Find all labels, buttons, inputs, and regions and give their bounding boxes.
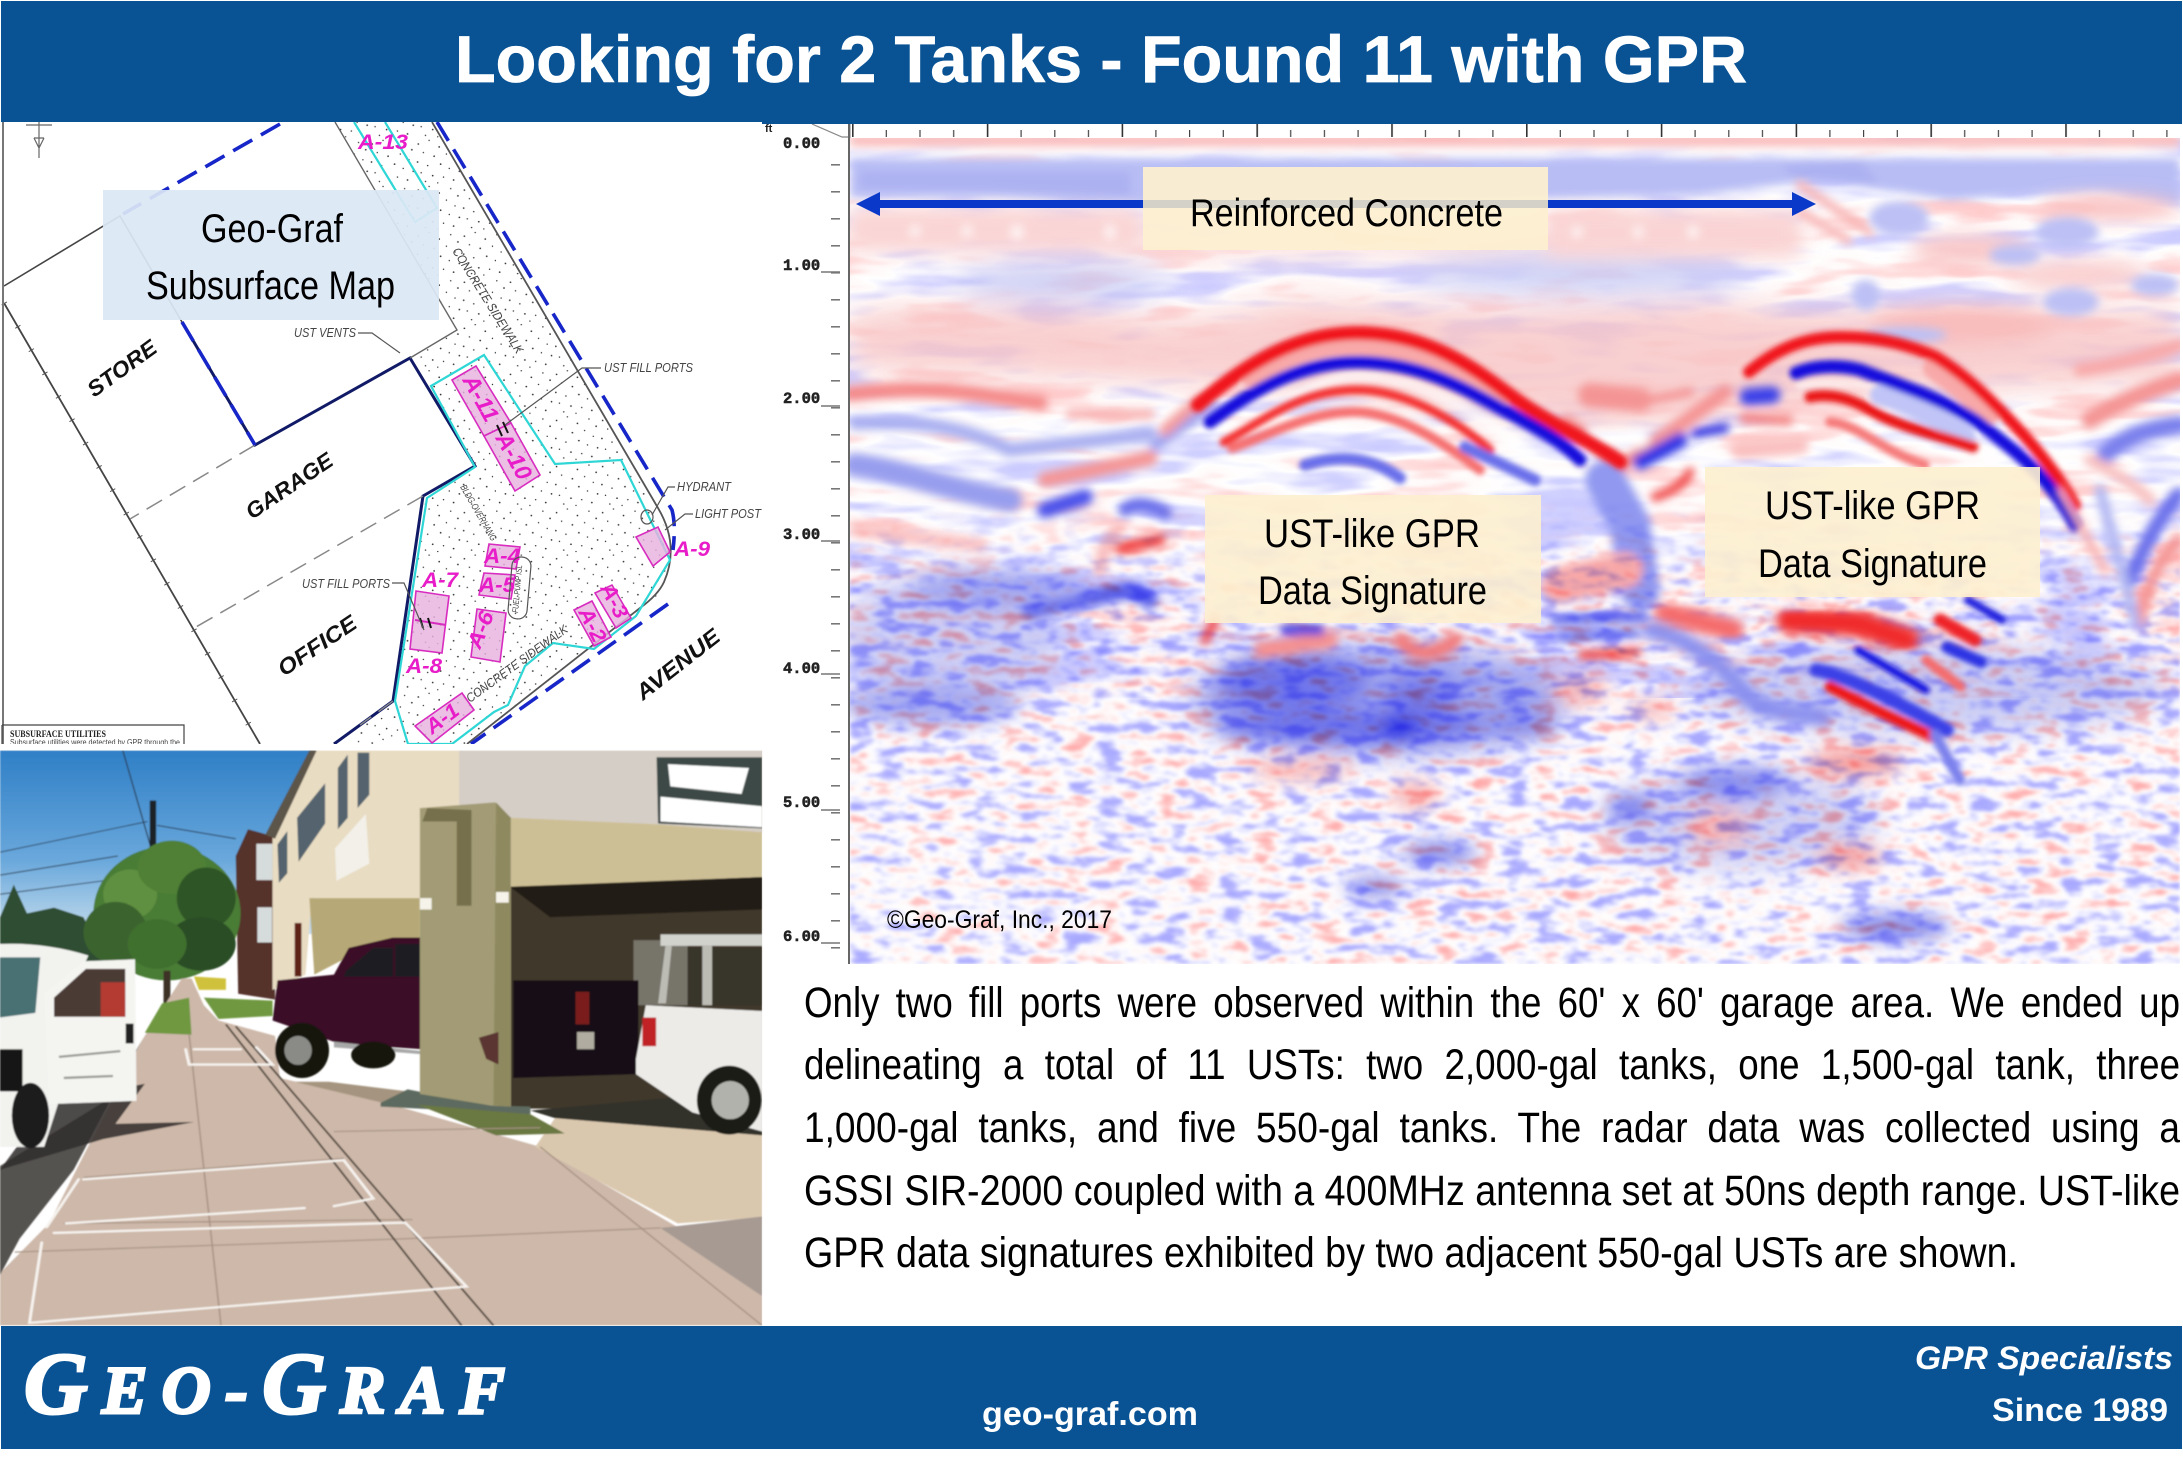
map annotations: UST FILL PORTS: [302, 577, 391, 591]
depth axis: ft: [765, 123, 773, 135]
noise layer lower: [850, 500, 2180, 964]
depth axis: 2.00: [783, 390, 820, 408]
tank labels: A-7: [421, 569, 459, 592]
tank labels: A-8: [405, 655, 442, 678]
cream building: [273, 750, 462, 990]
room labels: AVENUE: [630, 623, 726, 706]
wire shadows: [226, 1024, 494, 1326]
map annotations: [294, 245, 762, 705]
white pickup: [636, 1005, 762, 1132]
callout: UST signature 1: Data Signature: [1258, 569, 1487, 613]
text block: project description: [804, 979, 2180, 1277]
building outline: [3, 122, 671, 744]
chart: GPR radargram: [765, 123, 2182, 964]
diagonal stripes by arrow tip: [1800, 185, 1870, 240]
small pale spots: [909, 224, 1699, 240]
legend box: Subsurface utilities were detected by GPR through the: [10, 738, 180, 747]
brick building: [236, 829, 275, 999]
tank labels: [357, 131, 710, 740]
depth axis: 0.00: [783, 135, 820, 153]
panel: site photograph: [0, 750, 764, 1326]
hyperbola 1 halo: [1235, 376, 1530, 455]
callout: UST signature 1: [1205, 495, 1541, 623]
asphalt corner: [661, 1216, 762, 1296]
tank labels: A-3: [595, 579, 633, 623]
callout: UST signature 1: UST-like GPR: [1264, 512, 1480, 556]
header banner: [1, 1, 2182, 124]
map annotations: LIGHT POST: [695, 507, 762, 521]
callout: map title: Subsurface Map: [146, 264, 395, 308]
map annotations: BLDG OVERHANG: [457, 483, 498, 543]
broad layering: [840, 215, 2180, 870]
sidewalk joints: [15, 1034, 762, 1326]
upper windows: [277, 753, 369, 883]
concrete stippled area: [334, 122, 673, 744]
canopy underside: [511, 818, 762, 887]
callout: UST signature 2: Data Signature: [1758, 542, 1987, 586]
garage interior: [511, 877, 762, 1109]
upper wall: [459, 750, 764, 833]
distant trees: [0, 884, 103, 962]
blobs under callout 1: [1205, 620, 1455, 652]
depth axis: 4.00: [783, 660, 820, 678]
tank outlines: [410, 366, 670, 743]
cyan limit of survey: [354, 122, 670, 744]
footer banner: [1, 1326, 2182, 1449]
maroon pickup: [273, 937, 422, 1049]
room labels: OFFICE: [273, 609, 363, 681]
copyright note: ©Geo-Graf, Inc., 2017: [887, 906, 1112, 934]
dirt lot: [535, 1118, 762, 1223]
depth axis: 5.00: [783, 794, 820, 812]
leader lines: [358, 333, 693, 630]
map annotations: UST VENTS: [294, 326, 357, 340]
V trough and central reflectors: [1555, 392, 1800, 655]
right-side pale blue blobs: [1852, 201, 2179, 343]
icon: north arrow: [26, 122, 52, 158]
tank labels: A-11: [457, 369, 505, 426]
depth axis: 3.00: [783, 526, 820, 544]
tank labels: A-9: [673, 538, 710, 561]
map annotations: HYDRANT: [677, 480, 732, 494]
noise layer upper: [850, 138, 2180, 698]
tank labels: A-13: [357, 131, 408, 154]
hyperbola 1 reflectors: [1198, 333, 1620, 480]
sidewalk: [0, 978, 762, 1326]
map annotations: CONCRETE SIDEWALK: [449, 245, 526, 357]
map annotations: CONCRETE SIDEWALK: [464, 622, 571, 705]
map annotations: UST FILL PORTS: [604, 361, 694, 375]
column base: [381, 1089, 530, 1114]
right side reflectors: [2060, 345, 2180, 620]
lower slanted signatures: [1651, 600, 2002, 780]
legend box: [2, 725, 184, 747]
tank labels: A-6: [463, 608, 499, 653]
map annotations: FUEL PUMP ISL: [510, 564, 524, 613]
panel: subsurface map: [0, 122, 762, 747]
tank labels: A-1: [420, 699, 464, 740]
weeds: [417, 1105, 565, 1135]
room labels: [82, 334, 726, 706]
arrow: concrete extent: [856, 192, 1816, 216]
tank labels: A-2: [573, 603, 611, 647]
callout: UST signature 2: [1705, 467, 2040, 597]
depth axis: 1.00: [783, 257, 820, 275]
van: [0, 944, 88, 1147]
depth axis: [765, 123, 2182, 964]
logo: Geo-Graf: GEO-GRAF: [24, 1336, 505, 1433]
text block: project description: GPR data signatures exhibited by two adjacent 550-gal USTs are shown.: [804, 1229, 2018, 1277]
dark truck: [513, 980, 638, 1078]
fill port marks: [420, 422, 508, 628]
column: [420, 802, 511, 1107]
sky: [0, 750, 314, 934]
title: Looking for 2 Tanks - Found 11 with GPR: [455, 22, 1747, 96]
room labels: GARAGE: [241, 447, 339, 524]
entry recess: [309, 898, 420, 975]
tree: [83, 841, 241, 980]
tagline: GPR Specialists: [1915, 1340, 2173, 1376]
tank labels: A-4: [483, 545, 520, 568]
property boundary dashed: [123, 122, 674, 744]
radar data image: [840, 134, 2180, 964]
surface bands: [850, 134, 2180, 205]
grass strips: [145, 998, 192, 1035]
pink band, upper right: [850, 196, 2180, 343]
callout: reinforced concrete: Reinforced Concrete: [1190, 192, 1503, 235]
hyperbola 2 reflectors: [1749, 337, 2075, 525]
website: geo-graf.com: [982, 1395, 1198, 1432]
deep blue masses: [840, 570, 1950, 941]
tank labels: A-5: [478, 574, 515, 597]
street: [0, 1040, 142, 1275]
callout: UST signature 2: UST-like GPR: [1765, 484, 1980, 528]
callout: map title: Geo-Graf: [201, 207, 344, 251]
left reflectors: [850, 390, 1215, 610]
shaded ground under canopy: [295, 1082, 422, 1103]
hyperbola 2 halo: [1800, 383, 1990, 460]
since: Since 1989: [1992, 1392, 2168, 1428]
chalk marks: [29, 1047, 467, 1323]
legend box: SUBSURFACE UTILITIES: [10, 729, 106, 739]
van door: [44, 959, 137, 1104]
utility lines: [0, 750, 236, 894]
room labels: STORE: [82, 334, 163, 402]
depth axis: 6.00: [783, 928, 820, 946]
sign: [657, 757, 762, 828]
callout: map title: [103, 190, 439, 320]
tank labels: A-10: [490, 427, 538, 484]
callout: reinforced concrete: [1143, 167, 1548, 250]
